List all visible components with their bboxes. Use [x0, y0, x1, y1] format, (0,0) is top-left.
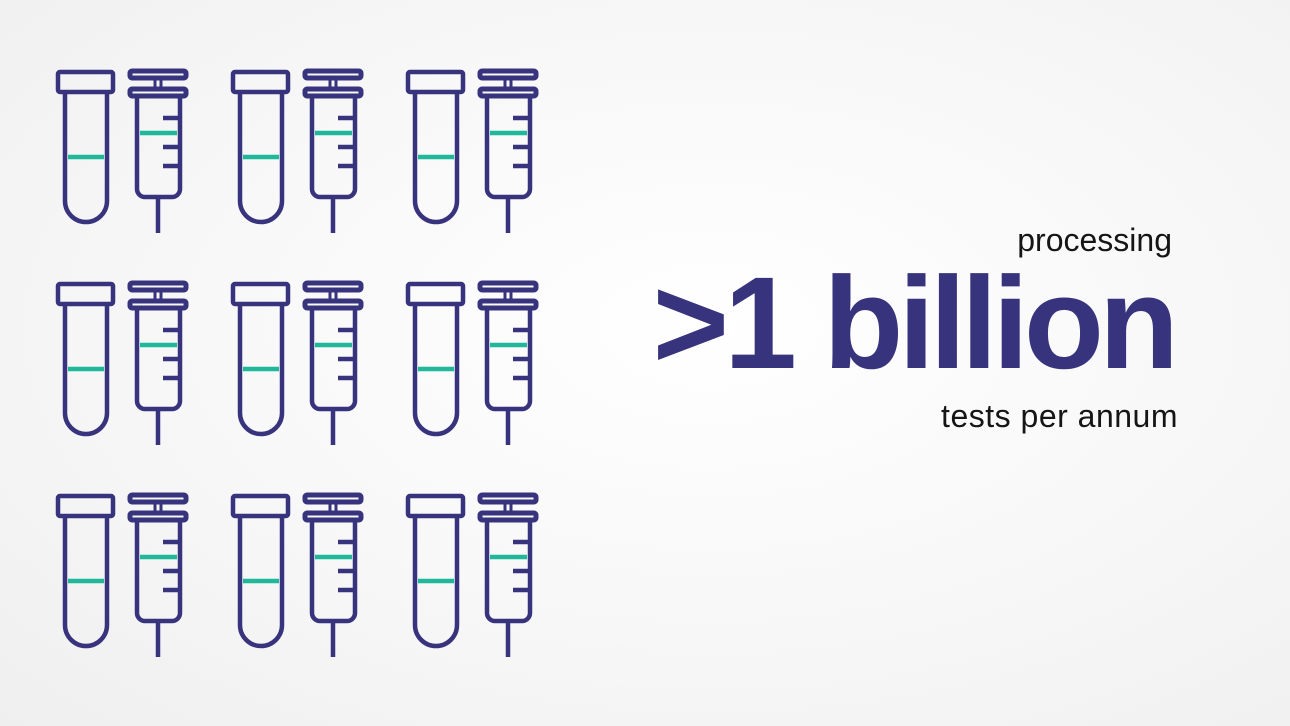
text block: statistic	[653, 222, 1178, 434]
row 2	[58, 283, 536, 445]
row 3	[58, 495, 536, 657]
headline number: >1 billion	[653, 249, 1174, 396]
label: tests per annum: tests per annum	[941, 398, 1178, 434]
icon grid: test tubes and syringes	[56, 68, 538, 657]
label: processing: processing	[1017, 222, 1172, 258]
row 1	[58, 71, 536, 233]
